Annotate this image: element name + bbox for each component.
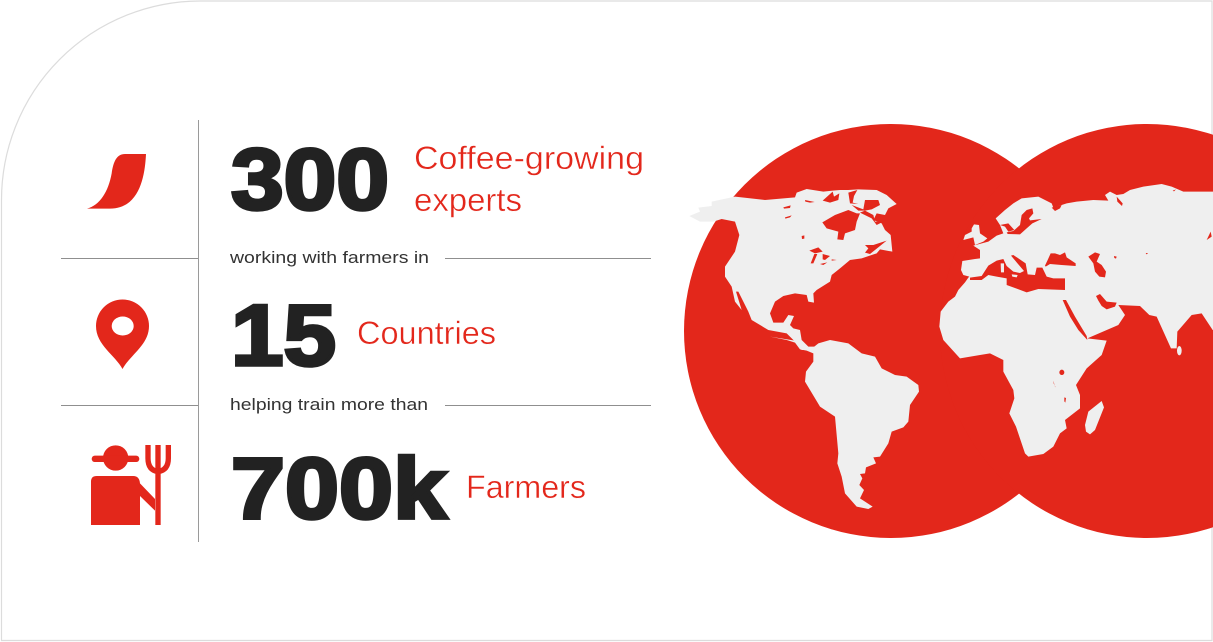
- icon: map pin: [96, 300, 149, 369]
- seas and lakes: North America: [783, 190, 887, 265]
- label: Countries: Countries: [357, 315, 496, 351]
- divider: row one right: [445, 258, 651, 260]
- icon: farmer with pitchfork: [91, 445, 168, 525]
- divider: row two left: [61, 404, 198, 406]
- statistic: 300: 300: [231, 132, 389, 228]
- statistic: 700k: 700k: [231, 441, 447, 537]
- statistic: 15: 15: [231, 288, 336, 384]
- label: Coffee-growing experts: experts: [414, 182, 522, 218]
- map discs: [684, 124, 1213, 538]
- label: Coffee-growing experts: Coffee-growing: [414, 140, 644, 176]
- landmass: South America: [770, 337, 919, 509]
- connector text: helping train more than: helping train more than: [230, 396, 428, 414]
- landmass: North and Central America: [689, 189, 897, 350]
- divider: row one left: [61, 258, 198, 260]
- seas: Asia: [1063, 189, 1212, 355]
- connector text: working with farmers in: working with farmers in: [229, 249, 429, 267]
- icon: coffee leaf: [87, 154, 146, 209]
- panel: world map: [684, 124, 1213, 538]
- divider: row two right: [445, 404, 651, 406]
- label: Coffee-growing experts: [414, 140, 644, 218]
- icon column divider: [198, 120, 200, 542]
- landmass: Eurasia and Africa: [939, 184, 1213, 457]
- seas: Europe: [970, 205, 1076, 292]
- label: Farmers: Farmers: [466, 469, 586, 505]
